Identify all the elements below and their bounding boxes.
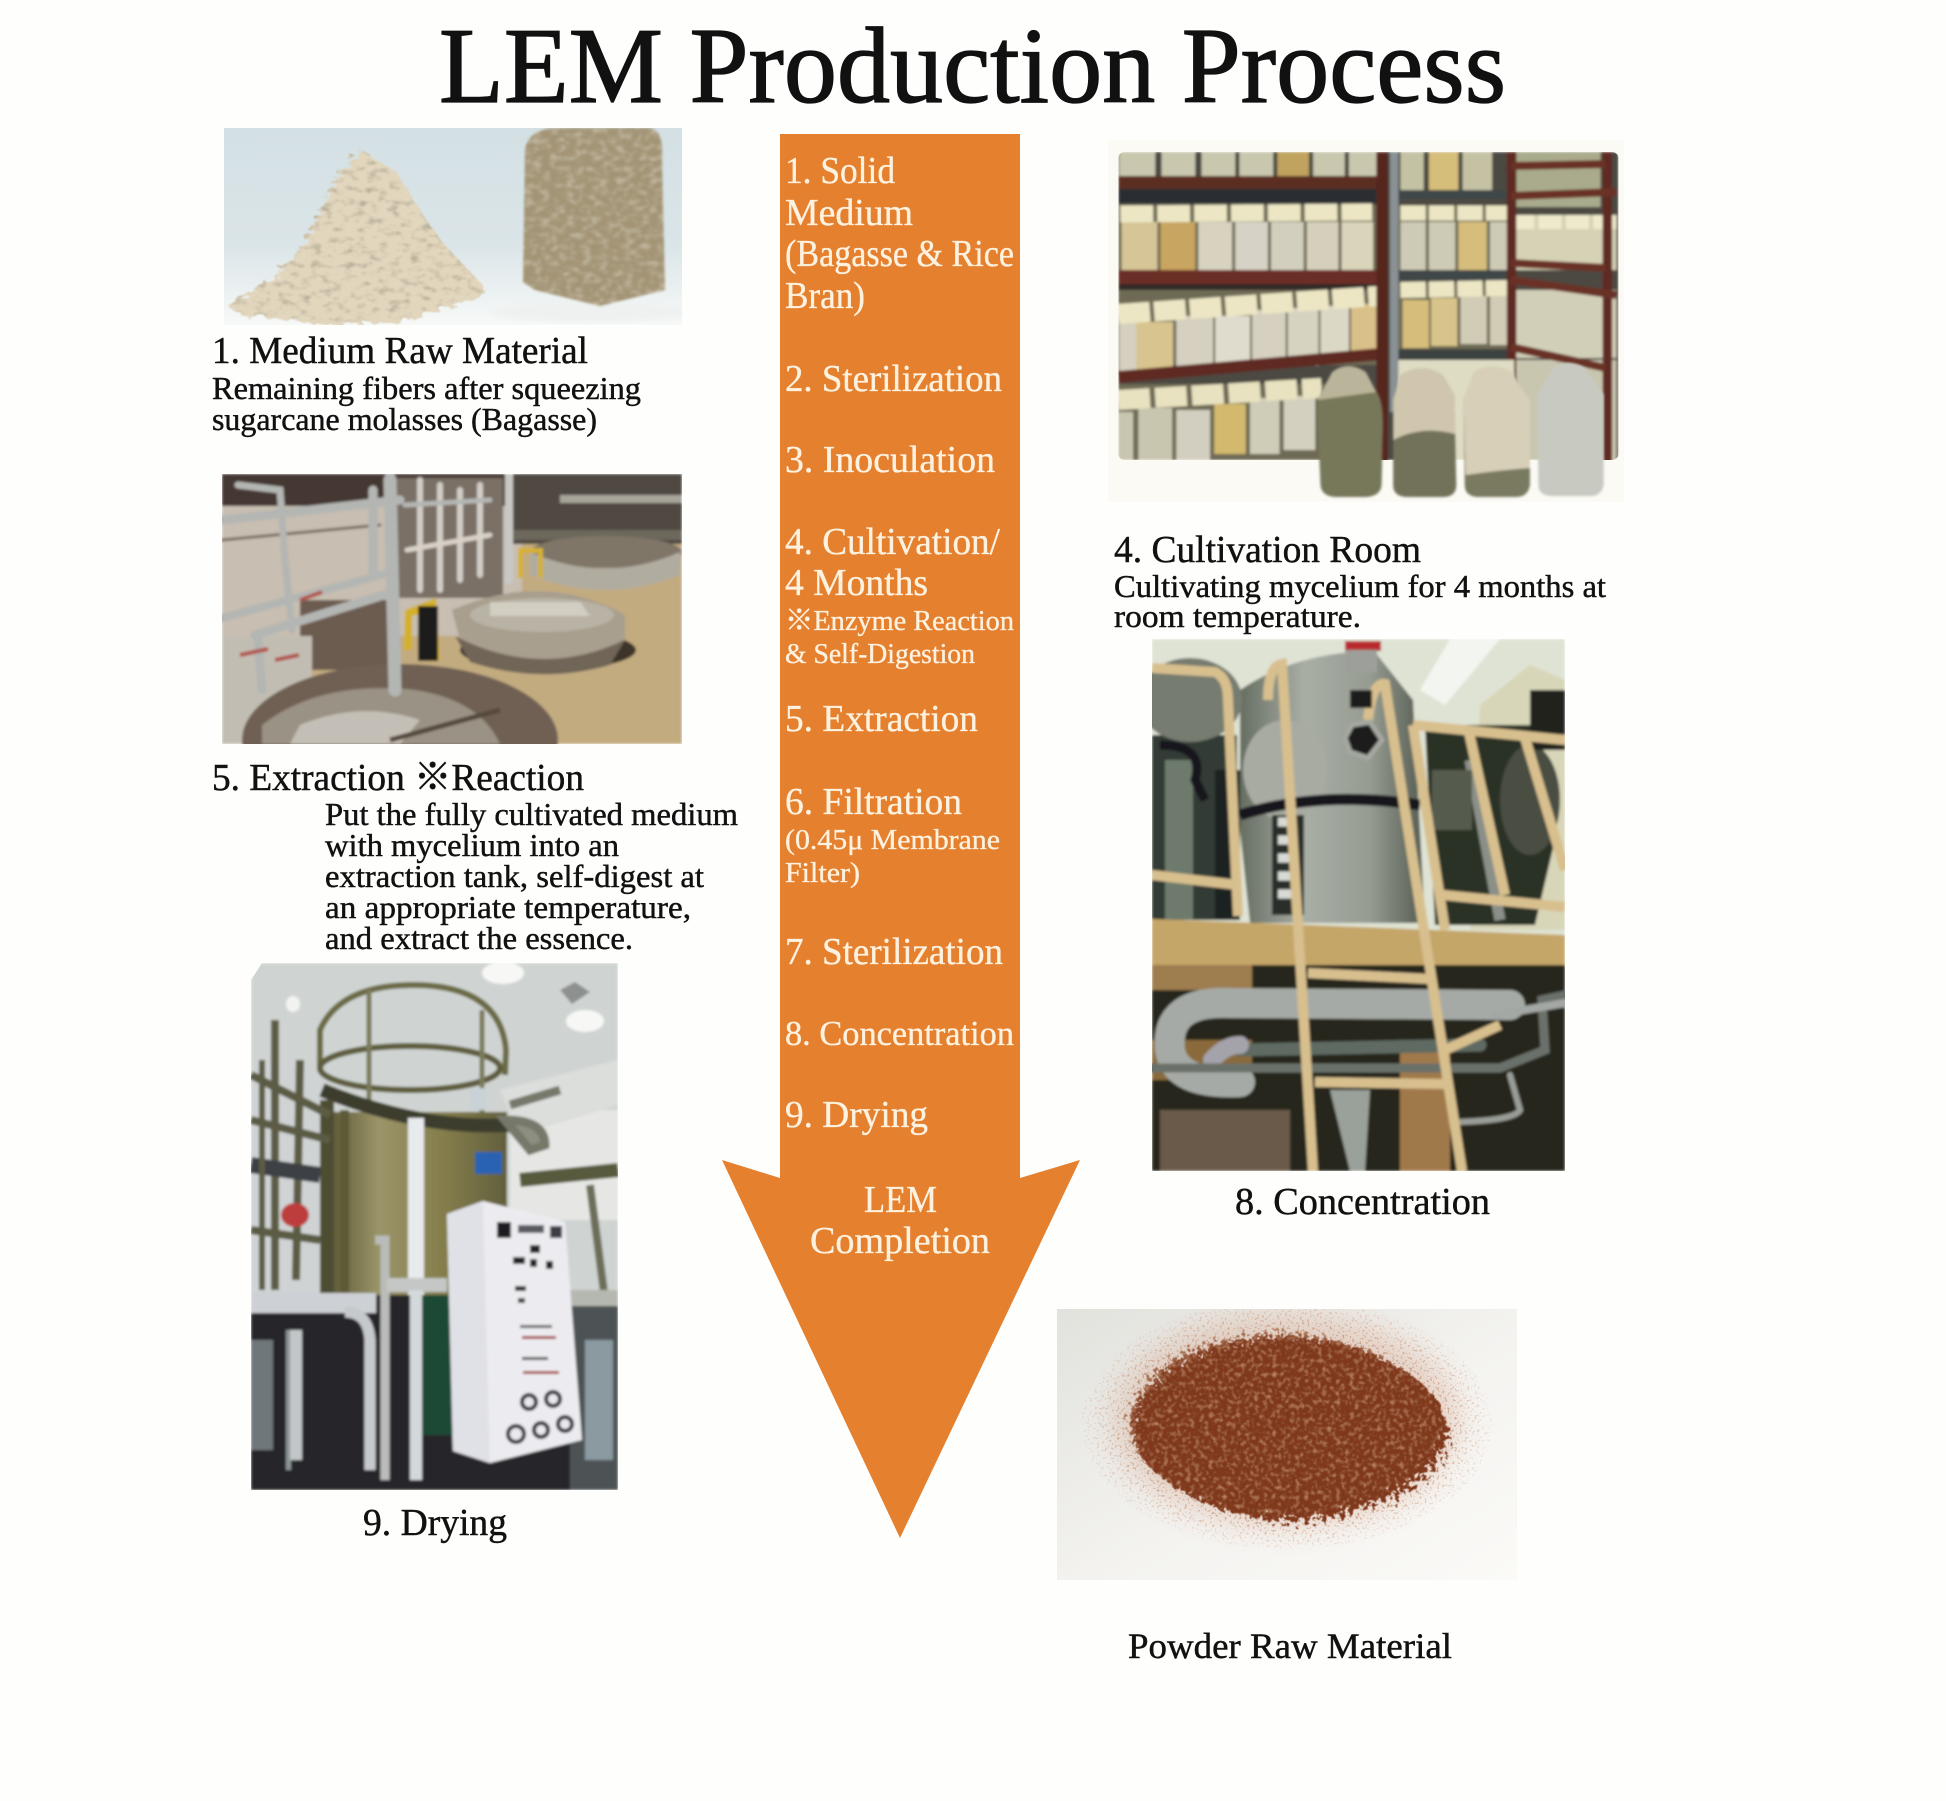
description: extraction: with mycelium into an xyxy=(325,827,619,863)
heading: step 5: 5. Extraction ※Reaction xyxy=(212,757,584,799)
step list xyxy=(785,150,1014,1136)
caption: step 8: 8. Concentration xyxy=(1235,1181,1490,1223)
step list: 5. Extraction xyxy=(785,698,978,740)
arrow shape xyxy=(722,134,1080,1538)
panel: concentration xyxy=(1138,639,1565,1223)
panel: cultivation room xyxy=(1108,140,1624,634)
arrow result text xyxy=(810,1179,990,1262)
step list: 7. Sterilization xyxy=(785,931,1003,973)
description: cultivation: Cultivating mycelium for 4 months at xyxy=(1114,568,1606,604)
step list: (Bagasse & Rice xyxy=(785,233,1014,275)
photo: cultivation shelves with jars xyxy=(1108,140,1624,502)
description: bagasse xyxy=(212,370,641,437)
photo: drying equipment xyxy=(251,962,618,1490)
arrow: process flow xyxy=(722,134,1080,1538)
title: LEM Production Process xyxy=(439,7,1506,126)
step list: Medium xyxy=(785,192,913,234)
description: extraction xyxy=(325,796,738,956)
photo: concentration equipment xyxy=(1138,639,1565,1171)
description: bagasse: Remaining fibers after squeezing xyxy=(212,370,641,406)
panel: medium raw material xyxy=(212,128,690,437)
heading: step 4: 4. Cultivation Room xyxy=(1114,529,1421,571)
step list: ※Enzyme Reaction xyxy=(785,605,1014,637)
photo: red-brown powder xyxy=(1057,1299,1517,1580)
arrow result text: LEM xyxy=(864,1179,937,1221)
description: extraction: an appropriate temperature, xyxy=(325,889,691,925)
heading: step 1: 1. Medium Raw Material xyxy=(212,330,588,372)
description: cultivation: room temperature. xyxy=(1114,598,1361,634)
photo: extraction tanks xyxy=(222,474,682,744)
step list: 6. Filtration xyxy=(785,781,962,823)
description: cultivation xyxy=(1114,568,1606,634)
step list: 4. Cultivation/ xyxy=(785,521,1000,563)
description: extraction: and extract the essence. xyxy=(325,920,633,956)
panel: powder raw material xyxy=(1057,1299,1517,1666)
step list: 8. Concentration xyxy=(785,1014,1014,1053)
caption: step 9: 9. Drying xyxy=(363,1502,507,1544)
caption: powder: Powder Raw Material xyxy=(1128,1626,1452,1666)
description: bagasse: sugarcane molasses (Bagasse) xyxy=(212,401,597,437)
step list: 3. Inoculation xyxy=(785,439,995,481)
step list: 4 Months xyxy=(785,562,928,604)
step list: 1. Solid xyxy=(785,150,895,192)
step list: Bran) xyxy=(785,275,865,317)
panel: extraction xyxy=(212,474,738,956)
panel: drying xyxy=(251,962,618,1544)
description: extraction: Put the fully cultivated medium xyxy=(325,796,738,832)
step list: (0.45μ Membrane xyxy=(785,824,1000,856)
arrow result text: Completion xyxy=(810,1220,990,1262)
description: extraction: extraction tank, self-digest at xyxy=(325,858,704,894)
photo: bagasse pile and bag xyxy=(224,128,690,325)
step list: Filter) xyxy=(785,857,860,889)
step list: & Self-Digestion xyxy=(785,638,975,670)
step list: 2. Sterilization xyxy=(785,358,1002,400)
step list: 9. Drying xyxy=(785,1094,928,1136)
